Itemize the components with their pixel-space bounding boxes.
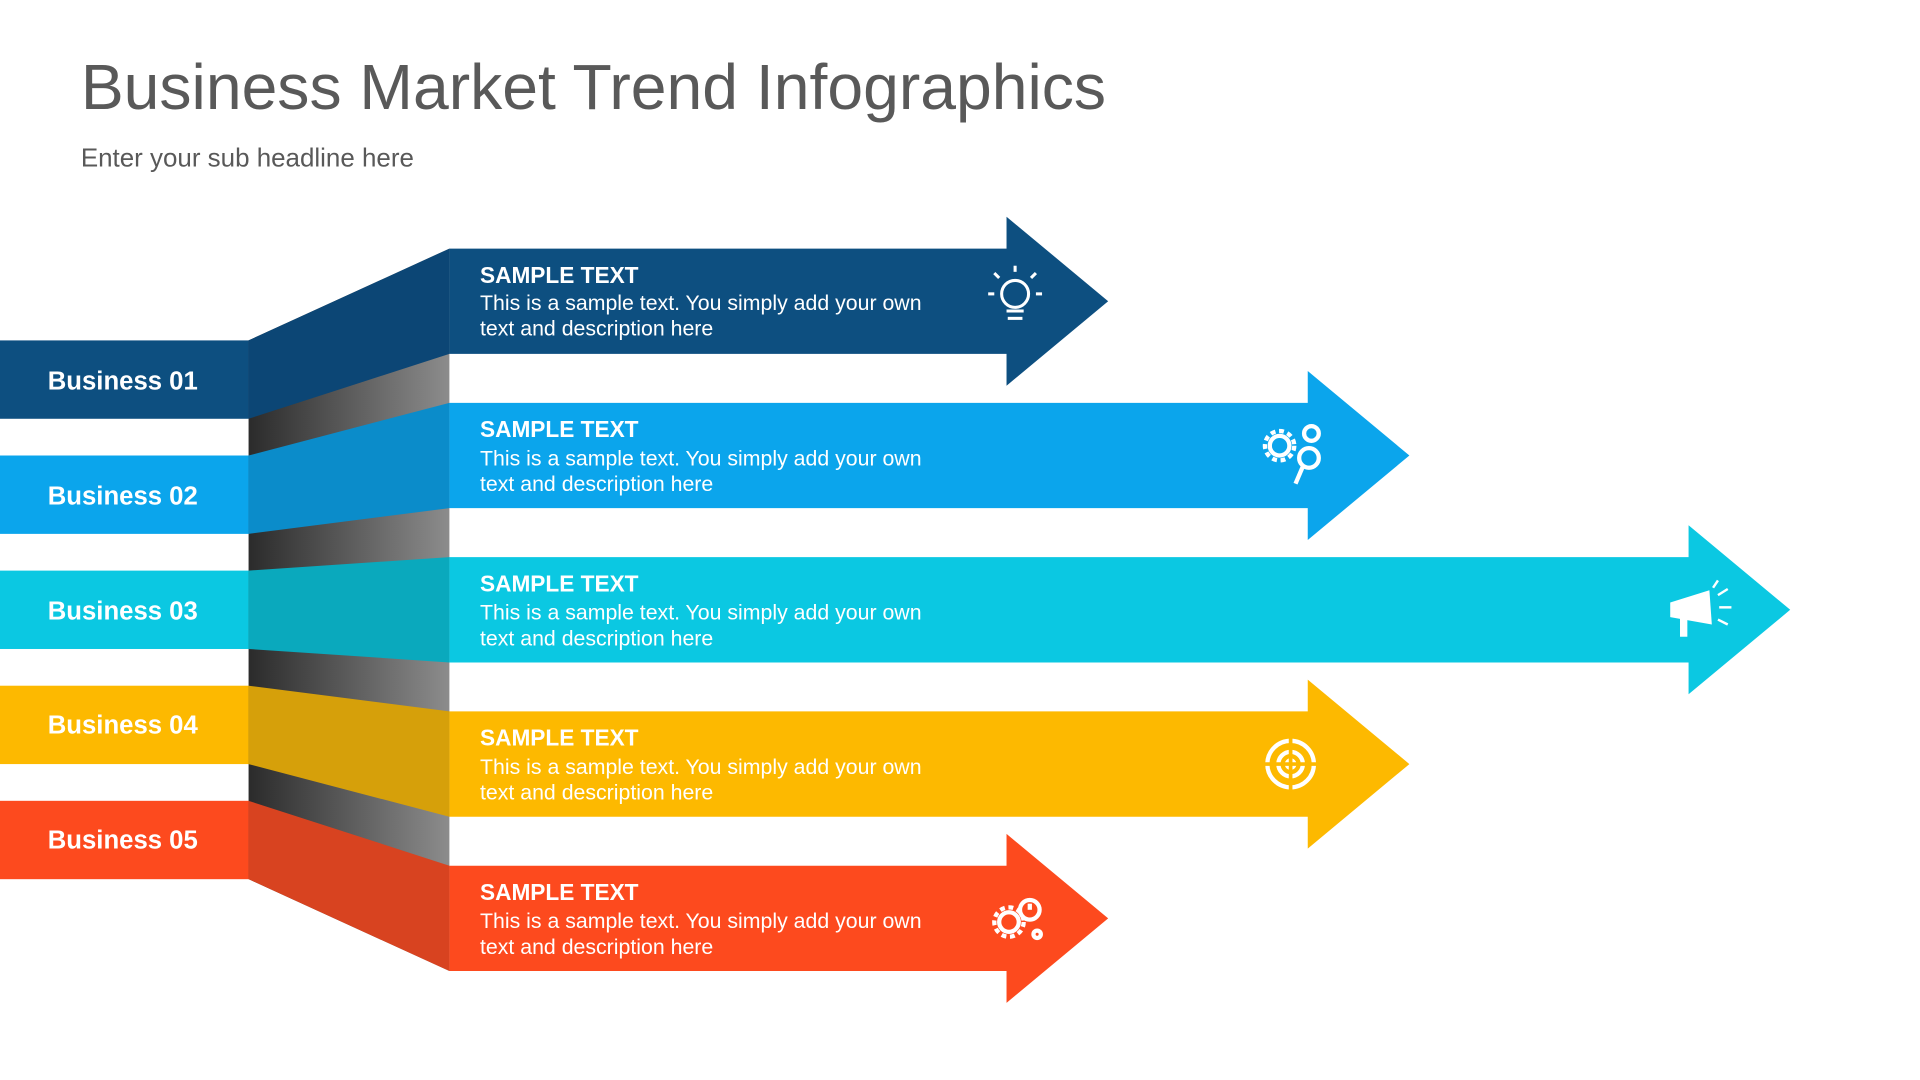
icon: target xyxy=(1264,737,1318,791)
row 4 xyxy=(0,680,1409,849)
arrow 02: text and description here xyxy=(480,472,713,496)
arrow 01 xyxy=(449,217,1108,386)
connector 04 xyxy=(249,686,449,817)
label: Business 01 xyxy=(0,340,249,419)
gray connector background xyxy=(249,249,449,971)
label: Business 05 xyxy=(0,801,249,879)
label: Business 02: Business 02 xyxy=(48,482,198,510)
arrow 03: text and description here xyxy=(480,626,713,650)
label: Business 04 xyxy=(0,686,249,764)
label: Business 03: Business 03 xyxy=(48,598,198,626)
arrow 05: SAMPLE TEXT xyxy=(480,879,639,905)
row 1 xyxy=(0,217,1108,419)
arrow 04: text and description here xyxy=(480,781,713,805)
arrow 03 xyxy=(449,525,1790,694)
arrow 04 xyxy=(449,680,1409,849)
title: Business Market Trend Infographics xyxy=(81,51,1106,123)
arrow 05: text and description here xyxy=(480,935,713,959)
connector 03 xyxy=(249,557,449,662)
row 5 xyxy=(0,801,1108,1003)
row 3 xyxy=(0,525,1790,694)
connector 05 xyxy=(249,801,449,971)
arrow 02 xyxy=(449,371,1409,540)
label: Business 04: Business 04 xyxy=(48,711,198,739)
label: Business 03 xyxy=(0,571,249,649)
icon: gears clock xyxy=(994,900,1041,938)
label: Business 05: Business 05 xyxy=(48,827,198,855)
arrow 03: SAMPLE TEXT xyxy=(480,570,639,596)
subtitle: Enter your sub headline here xyxy=(81,145,414,173)
icon: megaphone xyxy=(1670,580,1731,637)
connector 01 xyxy=(249,249,449,419)
arrow 04: This is a sample text. You simply add your own xyxy=(480,755,922,779)
row 2 xyxy=(0,371,1409,540)
arrow 02: SAMPLE TEXT xyxy=(480,416,639,442)
arrow 01: This is a sample text. You simply add your own xyxy=(480,291,922,315)
arrow 01: text and description here xyxy=(480,317,713,341)
arrow 01: SAMPLE TEXT xyxy=(480,262,639,288)
icon: gears search xyxy=(1265,426,1319,484)
icon: lightbulb xyxy=(988,266,1042,318)
arrow 03: This is a sample text. You simply add your own xyxy=(480,601,922,625)
connector 02 xyxy=(249,403,449,534)
arrow 04: SAMPLE TEXT xyxy=(480,725,639,751)
label: Business 01: Business 01 xyxy=(48,367,198,395)
arrow 05: This is a sample text. You simply add your own xyxy=(480,909,922,933)
label: Business 02 xyxy=(0,456,249,534)
arrow 02: This is a sample text. You simply add your own xyxy=(480,446,922,470)
arrow 05 xyxy=(449,834,1108,1003)
